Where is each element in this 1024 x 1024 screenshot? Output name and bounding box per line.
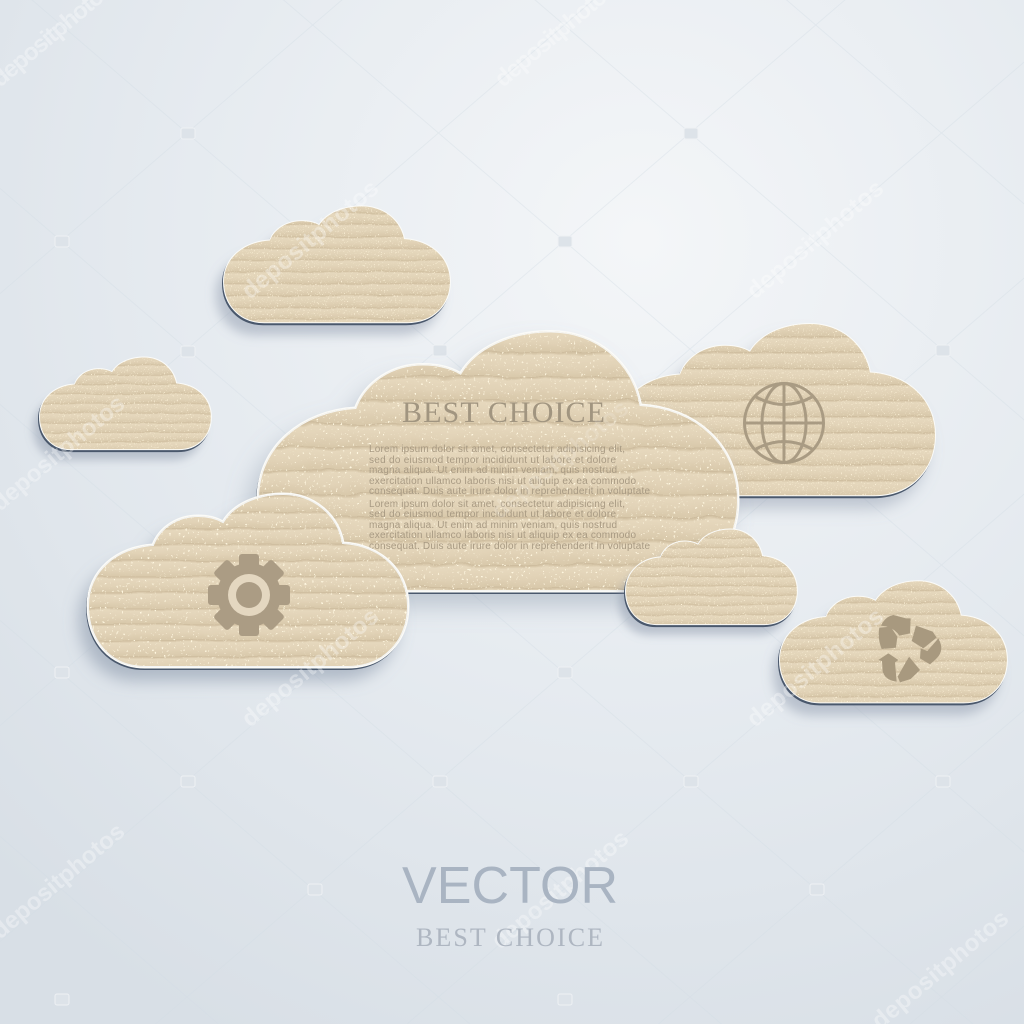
text block: lorem ipsum: exercitation ullamco laboris nisi ut aliquip ex ea commodo	[369, 530, 636, 541]
text block: lorem ipsum: sed do eiusmod tempor incididunt ut labore et dolore	[369, 509, 616, 520]
text block: lorem ipsum: Lorem ipsum dolor sit amet, consectetur adipisicing elit,	[369, 444, 625, 455]
icon: recycle	[878, 615, 941, 682]
text block: lorem ipsum: exercitation ullamco laboris nisi ut aliquip ex ea commodo	[369, 476, 636, 487]
text block: lorem ipsum	[369, 444, 650, 552]
text block: lorem ipsum: Lorem ipsum dolor sit amet, consectetur adipisicing elit,	[369, 499, 625, 510]
cloud: small left	[33, 350, 220, 460]
watermark text: depositphotos	[237, 175, 384, 305]
watermark text: depositphotos	[742, 603, 889, 733]
watermark text: depositphotos	[487, 825, 634, 955]
watermark text: depositphotos	[742, 175, 889, 305]
text block: lorem ipsum: consequat. Duis aute irure dolor in reprehenderit in voluptate	[369, 486, 650, 497]
cloud: gear	[79, 490, 415, 681]
text block: lorem ipsum: consequat. Duis aute irure dolor in reprehenderit in voluptate	[369, 541, 650, 552]
icon: gear	[208, 554, 290, 636]
cloud: globe	[607, 320, 945, 508]
heading: best choice: BEST CHOICE	[402, 396, 605, 429]
cloud: recycle	[773, 575, 1015, 715]
text block: lorem ipsum: magna aliqua. Ut enim ad minim veniam, quis nostrud	[369, 465, 617, 476]
footer title: vector: VECTOR	[402, 857, 618, 915]
cloud: top	[216, 200, 460, 335]
footer subtitle: best choice: BEST CHOICE	[416, 923, 603, 952]
text block: lorem ipsum: sed do eiusmod tempor incididunt ut labore et dolore	[369, 455, 616, 466]
watermark text: depositphotos	[237, 603, 384, 733]
cloud: main	[248, 325, 750, 606]
icon: globe	[744, 384, 824, 462]
cloud: small center	[619, 525, 805, 635]
text block: lorem ipsum: magna aliqua. Ut enim ad minim veniam, quis nostrud	[369, 520, 617, 531]
watermark text: depositphotos	[487, 395, 634, 525]
